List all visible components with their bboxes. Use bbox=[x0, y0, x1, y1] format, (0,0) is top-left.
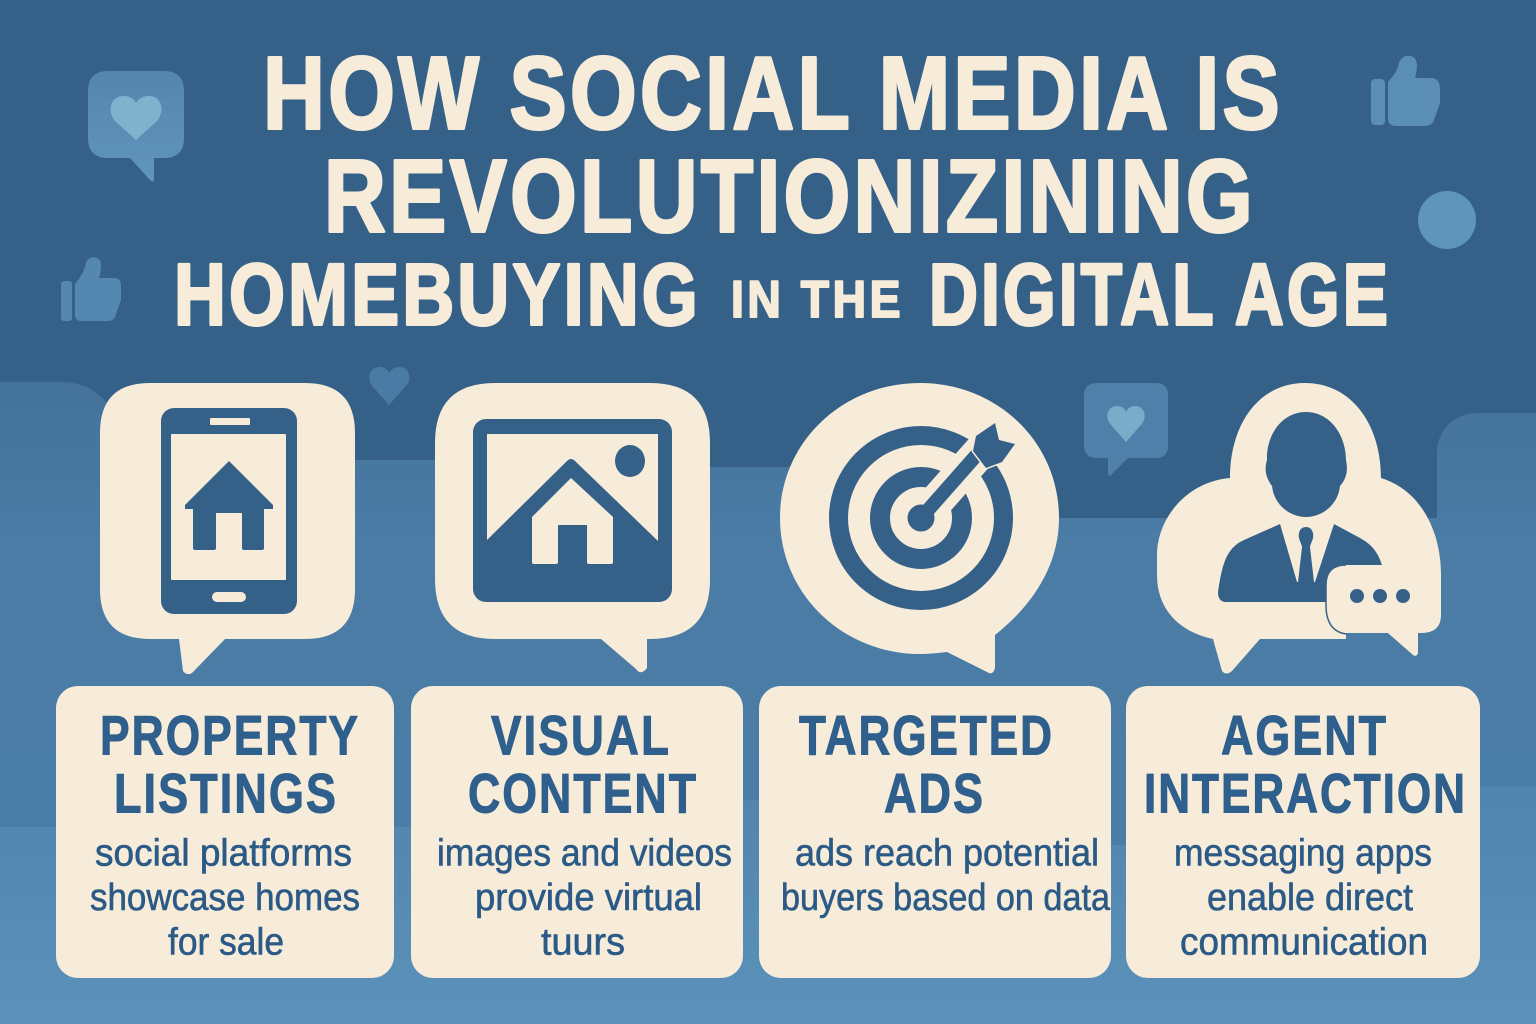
icon: phone with house bbox=[100, 383, 355, 674]
title: REVOLUTIONIZINING bbox=[324, 138, 1256, 254]
text: targeted ads description bbox=[781, 832, 1111, 919]
icon: target with arrow bbox=[780, 383, 1059, 673]
heading: targeted ads bbox=[799, 704, 1054, 824]
text: agent interaction description: enable direct bbox=[1207, 877, 1413, 919]
text: agent interaction description: messaging apps bbox=[1174, 832, 1432, 874]
panel: property listings bbox=[56, 686, 394, 978]
title bbox=[174, 36, 1391, 344]
icon: thumbs up left bbox=[61, 257, 121, 321]
text: visual content description bbox=[437, 832, 732, 964]
title: HOMEBUYING bbox=[174, 246, 701, 344]
heading: visual content: CONTENT bbox=[468, 762, 698, 824]
panel: targeted ads bbox=[759, 686, 1111, 978]
heading: visual content bbox=[468, 704, 698, 824]
heading: agent interaction bbox=[1144, 704, 1467, 824]
icon: picture with house bbox=[435, 383, 710, 672]
title: DIGITAL AGE bbox=[929, 246, 1391, 344]
text: targeted ads description: buyers based on data bbox=[781, 877, 1111, 919]
panel: agent interaction bbox=[1126, 686, 1480, 978]
heading: property listings: LISTINGS bbox=[114, 762, 338, 824]
heading: visual content: VISUAL bbox=[491, 704, 671, 766]
text: agent interaction description: communication bbox=[1180, 922, 1428, 964]
heading: property listings bbox=[100, 704, 360, 824]
text: property listings description: social platforms bbox=[95, 832, 352, 874]
title: HOW SOCIAL MEDIA IS bbox=[263, 36, 1283, 150]
icon: small heart bbox=[369, 367, 410, 405]
icon: agent with chat bubble bbox=[1157, 383, 1441, 674]
heading: targeted ads: TARGETED bbox=[799, 704, 1054, 766]
icon: heart speech bubble right bbox=[1084, 383, 1168, 476]
heading: targeted ads: ADS bbox=[884, 762, 985, 824]
text: visual content description: provide virtual bbox=[475, 877, 702, 919]
heading: agent interaction: AGENT bbox=[1221, 704, 1388, 766]
text: visual content description: images and videos bbox=[437, 832, 732, 874]
text: visual content description: tuurs bbox=[541, 922, 625, 964]
text: property listings description: showcase homes bbox=[90, 877, 360, 919]
icon: circle right bbox=[1418, 191, 1476, 249]
text: targeted ads description: ads reach potential bbox=[795, 832, 1099, 874]
icon: heart speech bubble top left bbox=[88, 71, 184, 182]
heading: property listings: PROPERTY bbox=[100, 704, 360, 766]
panel: visual content bbox=[411, 686, 743, 978]
text: property listings description bbox=[90, 832, 360, 964]
text: property listings description: for sale bbox=[168, 922, 284, 964]
icon: thumbs up right bbox=[1371, 56, 1440, 126]
title: IN THE bbox=[731, 271, 904, 329]
text: agent interaction description bbox=[1174, 832, 1432, 964]
